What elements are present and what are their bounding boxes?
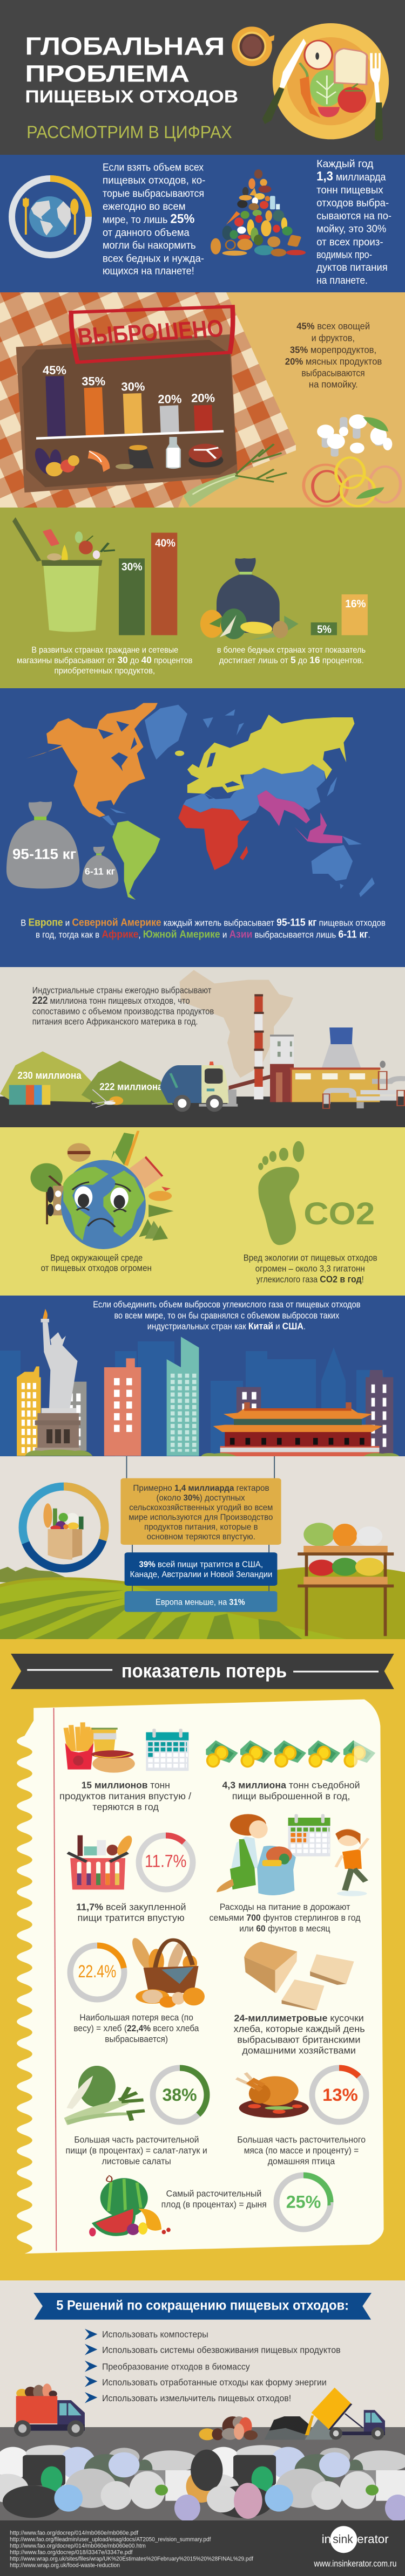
- text: 25 percent: мире, то лишь 25%: [103, 211, 194, 226]
- item: 38 percent: [64, 2066, 207, 2167]
- list: sources: http://www.fao.org/docrep/014/mb060e/mb060e.pdf: [10, 2529, 138, 2536]
- bar chart: developed countries: 30%: [122, 561, 143, 573]
- icon: grocery bag: [43, 1503, 84, 1560]
- list: solutions: Преобразование отходов в биомассу: [102, 2362, 250, 2372]
- bar chart: poor countries: 5%: [317, 624, 332, 635]
- panel: world map: [0, 688, 405, 968]
- bar chart board: [16, 334, 238, 492]
- list: sources: http://www.fao.org/fileadmin/user_upload/esag/docs/AT2050_revision_summary.pdf: [10, 2536, 211, 2543]
- list: sources: http://www.fao.org/docrep/014/mb060e/mb060e00.htm: [10, 2542, 146, 2549]
- illustration: truck with garbage: [14, 2383, 85, 2437]
- icon: trash bin with food: [12, 517, 115, 632]
- hanging strings: [126, 1456, 274, 1593]
- list: solutions: Использовать компостеры: [102, 2330, 208, 2340]
- illustration: celery: [184, 444, 287, 507]
- chart: waste piles: [0, 1051, 173, 1107]
- icon: sad globe: [30, 1131, 174, 1249]
- skyline silhouettes: [0, 1341, 383, 1456]
- text: 25 percent: торые выбрасываются: [103, 188, 204, 200]
- text: 4.3 million: [222, 1779, 360, 1801]
- panel: header: [0, 0, 405, 155]
- callout: 31 percent: [125, 1591, 277, 1612]
- icon: bread loaf: [244, 1942, 354, 2010]
- icon: Statue of Liberty: [25, 1309, 92, 1456]
- title: ПРОБЛЕМА: [25, 60, 190, 87]
- chart: food waste ring: [23, 1486, 105, 1568]
- panel: environmental harm: [0, 1127, 405, 1296]
- text: per capita waste: [21, 917, 386, 940]
- text: 22.4 percent: [73, 2012, 199, 2044]
- text: 4.3 million: 4,3 миллиона тонн съедобной: [222, 1779, 360, 1790]
- text: poultry: домашняя птица: [268, 2156, 335, 2167]
- callout: 39 percent: 39% всей пищи тратится в США,: [139, 1560, 263, 1570]
- text: 15 million: продуктов питания впустую /: [59, 1791, 192, 1801]
- panel: industrial countries: [0, 967, 405, 1128]
- bar chart: poor countries: 16%: [345, 598, 366, 610]
- text: developed countries: [17, 646, 192, 675]
- icon: garbage bag with vegetables: [200, 558, 299, 640]
- title: ПИЩЕВЫХ ОТХОДОВ: [25, 87, 238, 106]
- text: 22.4 percent: выбрасывается): [105, 2034, 168, 2044]
- icon: large bag 95-115 kg: 95-115 кг: [12, 846, 76, 862]
- icon: fast food and calendar: [65, 1722, 188, 1773]
- icon: watermelon and fruit: [89, 2175, 171, 2236]
- text: 11.7 percent: 11,7% всей закупленной: [76, 1901, 186, 1913]
- text: melon: Самый расточительный: [166, 2189, 261, 2199]
- callout: 1.4 billion hectares: мире используются для Производство: [129, 1512, 273, 1522]
- text: 222 million tons: 222 миллиона тонн пищевых отходов, что: [32, 995, 190, 1006]
- chart: ring 38 percent: [153, 2068, 207, 2122]
- chart: ring 11.7 percent: 11.7%: [145, 1851, 186, 1871]
- text: 22.4 percent: Наибольшая потеря веса (по: [79, 2012, 193, 2023]
- text: discard shares: выбрасываются: [301, 368, 365, 379]
- icon: footprint CO2: CO2: [303, 1196, 375, 1231]
- text: discard shares: на помойку.: [309, 379, 358, 390]
- text: environmental harm: от пищевых отходов огромен: [41, 1263, 152, 1273]
- item: 15 million tons: [59, 1722, 192, 1812]
- text: 1.3 billion tons: Каждый год: [316, 158, 373, 170]
- icon: small bag 6-11 kg: [82, 846, 118, 889]
- panel: skyline emissions: [0, 1296, 405, 1457]
- text: 25 percent: могли бы накормить: [103, 239, 196, 251]
- text: emissions comparison: [93, 1299, 361, 1332]
- callout: 31 percent: Европа меньше, на 31%: [156, 1598, 245, 1607]
- icon: garbage truck: [160, 1061, 238, 1112]
- text: 700 pounds: или 60 фунтов в месяц: [239, 1923, 330, 1934]
- tablecloth: [0, 292, 296, 508]
- text: lettuce: пищи (в процентах) = салат-латук и: [66, 2146, 207, 2156]
- chart: ring 22.4 percent: [70, 1945, 124, 1999]
- list: sources: http://www.wrap.org.uk/sites/files/wrap/UK%20Estimates%20February%2015%20%28FINAL%29.pdf: [10, 2555, 253, 2562]
- item: 4.3 million tons: [206, 1741, 377, 1801]
- item: 700 pounds: [210, 1814, 368, 1934]
- chart: ring 38 percent: 38%: [162, 2085, 197, 2105]
- panel: loss indicators: [0, 1639, 405, 2281]
- ribbon heading: loss indicators: [11, 1654, 394, 1689]
- logo: InSinkErator: [314, 2526, 396, 2568]
- callout: 1.4 billion hectares: [120, 1478, 281, 1545]
- bar chart board: 45%: [43, 364, 66, 377]
- map: Africa silhouette: [180, 970, 293, 1078]
- item: 11.7 percent: [68, 1834, 193, 1923]
- text: 25 percent: от данного объема: [103, 227, 190, 238]
- icon: roast turkey: [237, 2073, 309, 2118]
- text: 222 million tons: [32, 985, 214, 1027]
- callout: 1.4 billion hectares: Примерно 1,4 миллиарда гектаров: [133, 1483, 269, 1493]
- text: melon: плод (в процентах) = дыня: [161, 2200, 267, 2210]
- world map: [26, 703, 375, 900]
- text: 25 percent: всех бедных и нужда-: [103, 253, 204, 264]
- list: solutions: [85, 2329, 341, 2403]
- panel: farmland use: [0, 1456, 405, 1640]
- text: discard shares: [285, 321, 382, 390]
- text: developed countries: приобретенных продуктов,: [54, 666, 155, 675]
- ribbon heading: loss indicators: показатель потерь: [122, 1660, 287, 1682]
- text: 25 percent: [103, 162, 205, 277]
- text: lettuce: [66, 2135, 207, 2167]
- callout: 1.4 billion hectares: (около 30%) доступных: [156, 1493, 245, 1503]
- item: 22.4 percent: [70, 1937, 205, 2044]
- text: melon: [161, 2189, 267, 2210]
- illustration: Chinese buildings: [201, 1370, 399, 1456]
- callout: 1.4 billion hectares: сельскохозяйственных угодий во всем: [129, 1503, 273, 1512]
- panel: intro statistics: [0, 155, 405, 293]
- icon: vegetable stall: [298, 1523, 394, 1636]
- bar chart: poor countries: [311, 594, 368, 635]
- list: sources: http://www.fao.org/docrep/018/i3347e/i3347e.pdf: [10, 2548, 133, 2556]
- title: [25, 32, 238, 106]
- panel: discarded food chart: [0, 292, 405, 508]
- icon: food pyramid: [211, 169, 306, 257]
- icon: footprint CO2: [258, 1141, 375, 1245]
- text: environmental harm: [41, 1253, 152, 1273]
- notebook paper: [17, 1700, 384, 2253]
- icon: bread basket: [129, 1937, 205, 2008]
- text: 25 percent: ющихся на планете!: [103, 265, 194, 277]
- icon: plate with food: [262, 23, 389, 141]
- bar chart board: 30%: [121, 380, 145, 393]
- bar chart: developed countries: [119, 533, 177, 635]
- text: 25 percent: Если взять объем всех: [103, 162, 204, 173]
- illustration: USA buildings: [17, 1337, 199, 1456]
- text: CO2 harm: углекислого газа CO2 в год!: [256, 1273, 364, 1284]
- text: lettuce: листовые салаты: [102, 2156, 171, 2167]
- chart: waste piles: 230 миллиона: [18, 1070, 82, 1081]
- illustration: row of garbage bags: [0, 2445, 405, 2522]
- title: ГЛОБАЛЬНАЯ: [25, 32, 225, 60]
- text: poor countries: [217, 646, 366, 665]
- text: lettuce: Большая часть расточительной: [74, 2135, 199, 2145]
- text: 22.4 percent: весу) = хлеб (22,4% всего хлеба: [73, 2023, 199, 2033]
- text: 4.3 million: пищи выброшенной в год,: [232, 1791, 350, 1801]
- callout: 1.4 billion hectares: основном теряются впустую.: [147, 1532, 255, 1542]
- text: poultry: [237, 2135, 366, 2167]
- text: 15 million: 15 миллионов тонн: [82, 1779, 170, 1790]
- item: 13 percent: [237, 2068, 366, 2167]
- icon: globe on plate: [12, 179, 89, 255]
- icon: factory: [228, 994, 405, 1108]
- icon: money row: [206, 1741, 377, 1767]
- text: 15 million: [59, 1779, 192, 1812]
- illustration: woman, bag, calendar, child: [217, 1814, 368, 1896]
- callout: 39 percent: [125, 1552, 277, 1586]
- text: 24 mm bread: домашними хозяйствами: [242, 2045, 356, 2056]
- icon: shopping basket: [68, 1834, 135, 1889]
- chart: ring 25 percent: 25%: [286, 2191, 321, 2212]
- chart: ring 22.4 percent: 22.4%: [78, 1961, 116, 1981]
- chart: waste piles: 222 миллиона: [99, 1081, 163, 1092]
- text: per capita waste: в год, тогда как в Африке, Южной Америке и Азии выбрасывается лишь 6-11 кг.: [36, 928, 370, 940]
- text: 24 mm bread: [234, 2012, 365, 2056]
- bar chart board: 20%: [158, 392, 181, 406]
- chart: ring 13 percent: 13%: [322, 2085, 358, 2105]
- bar chart board: 20%: [191, 391, 215, 405]
- stamp: discarded: [71, 306, 233, 362]
- text: 222 million tons: питания всего Африканского материка в год.: [32, 1017, 198, 1027]
- stamp: discarded: ВЫБРОШЕНО: [76, 314, 225, 351]
- text: poor countries: достигает лишь от 5 до 16 процентов.: [219, 654, 364, 665]
- text: 11.7 percent: пищи тратится впустую: [78, 1912, 185, 1923]
- chart: ring 25 percent: [276, 2175, 330, 2229]
- text: discard shares: 45% всех овощей: [296, 321, 370, 332]
- text: 222 million tons: Индустриальные страны ежегодно выбрасывают: [32, 985, 212, 996]
- icon: small bag 6-11 kg: 6-11 кг: [85, 866, 115, 876]
- list: sources: http://www.wrap.org.uk/food-waste-reduction: [10, 2561, 120, 2568]
- chart: ring 11.7 percent: [139, 1835, 193, 1889]
- ground road: [0, 1097, 405, 1128]
- logo: InSinkErator: erator: [357, 2532, 389, 2546]
- text: 25 percent: ежегодно во всем: [103, 201, 186, 213]
- text: 25 percent: пищевых отходов, ко-: [103, 175, 205, 186]
- text: environmental harm: Вред окружающей среде: [50, 1253, 143, 1263]
- logo: InSinkErator: sink: [333, 2532, 353, 2546]
- panel: footer: [0, 2520, 405, 2576]
- text: emissions comparison: индустриальных стран как Китай и США.: [147, 1320, 306, 1332]
- text: developed countries: магазины выбрасывают от 30 до 40 процентов: [17, 654, 192, 665]
- item: 25 percent: [89, 2175, 330, 2236]
- illustration: garbage piles and dump truck: [199, 2388, 385, 2440]
- callout: 39 percent: Канаде, Австралии и Новой Зеландии: [130, 1570, 272, 1579]
- icon: lettuce and celery: [64, 2066, 145, 2125]
- panel: five solutions: [0, 2280, 405, 2524]
- panel: developed vs poor countries: [0, 508, 405, 688]
- ribbon heading: five solutions: [33, 2293, 372, 2320]
- item: 24 mm bread: [234, 1942, 365, 2056]
- icon: coffee cup: [232, 26, 274, 66]
- text: developed countries: В развитых странах граждане и сетевые: [31, 646, 178, 655]
- bar chart board: 35%: [82, 374, 105, 388]
- text: 1.3 billion tons: [316, 158, 392, 286]
- icon: large bag 95-115 kg: [6, 801, 79, 888]
- callout: 1.4 billion hectares: продуктов питания, которые в: [144, 1522, 258, 1532]
- chart: ring 13 percent: [312, 2068, 366, 2122]
- text: 15 million: теряются в год: [92, 1801, 159, 1812]
- text: 700 pounds: [210, 1902, 361, 1934]
- text: 222 million tons: сопоставимо с объемом производства продуктов: [32, 1006, 214, 1016]
- text: discard shares: и фруктов,: [312, 333, 355, 343]
- text: 11.7 percent: [76, 1901, 186, 1923]
- fields: [0, 1566, 405, 1640]
- bar chart: developed countries: 40%: [155, 537, 176, 549]
- list: sources: [10, 2529, 253, 2568]
- text: 24 mm bread: 24-миллиметровые кусочки: [234, 2012, 364, 2024]
- logo: InSinkErator: in: [322, 2532, 331, 2546]
- text: CO2 harm: [244, 1253, 377, 1284]
- illustration: mushrooms and peppers: [303, 414, 401, 506]
- subtitle: РАССМОТРИМ В ЦИФРАХ: [26, 123, 232, 142]
- list: solutions: Использовать измельчитель пищевых отходов!: [102, 2393, 291, 2403]
- text: 1.3 billion tons: на планете.: [316, 275, 368, 286]
